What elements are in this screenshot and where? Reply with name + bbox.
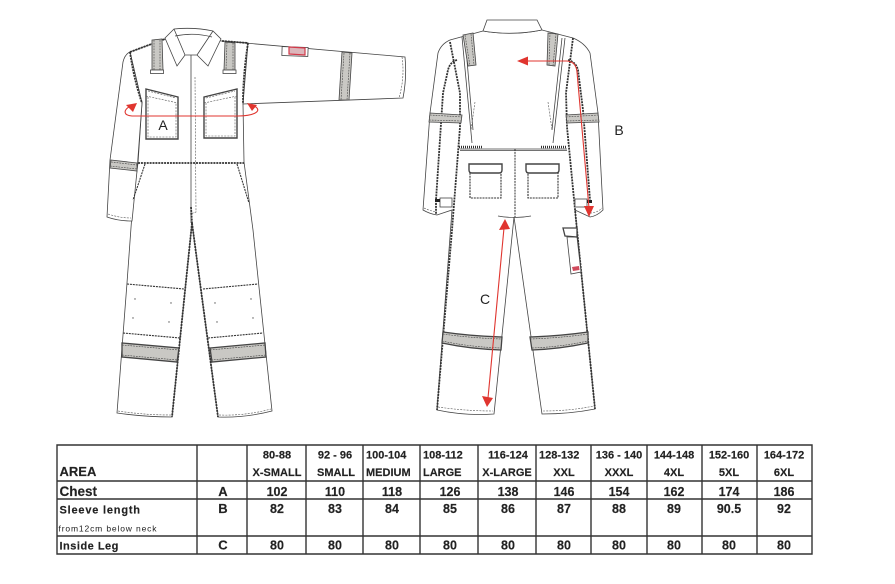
header row: [60, 450, 804, 479]
header row: MEDIUM: [366, 467, 411, 479]
inside leg row: 80: [667, 538, 681, 552]
forearm reflective band: [110, 160, 137, 171]
back shoulder bands: [463, 33, 558, 66]
inside leg row: 80: [557, 538, 571, 552]
header row: X-LARGE: [482, 467, 532, 479]
inner leg seams: [172, 223, 218, 417]
front body outline: [117, 39, 272, 417]
label B: B: [614, 122, 624, 138]
header row: X-SMALL: [253, 467, 302, 479]
chest row: 154: [609, 485, 629, 499]
sleeve length row: 87: [557, 502, 571, 516]
sleeve length row: 83: [328, 502, 342, 516]
leg tool pocket: [563, 228, 581, 274]
back body outline: [423, 30, 603, 414]
sleeve reflective band: [339, 52, 352, 100]
header row: 128-132: [539, 450, 579, 462]
right knee panel: [203, 284, 263, 338]
sleeve length row: 89: [667, 502, 681, 516]
header row: SMALL: [317, 467, 355, 479]
chest row: 186: [774, 485, 794, 499]
chest row: 102: [267, 485, 287, 499]
table grid: [57, 445, 812, 554]
left leg reflective band: [122, 343, 179, 362]
collar: [165, 28, 221, 66]
sleeve length row: 85: [443, 502, 457, 516]
sleeve length row: 86: [501, 502, 515, 516]
left sleeve: [107, 52, 142, 221]
sleeve length row: 90.5: [717, 502, 741, 516]
inside leg row: C: [218, 538, 228, 552]
header row: LARGE: [423, 467, 462, 479]
header row: 100-104: [366, 450, 407, 462]
sleeve badge: [282, 47, 308, 56]
right back pocket: [526, 164, 559, 198]
chest row: Chest: [60, 484, 98, 499]
shoulder bands: [150, 39, 236, 74]
sleeve length row: from12cm below neck: [58, 524, 157, 534]
chest row: 146: [554, 485, 574, 499]
sleeve length row: 82: [270, 502, 284, 516]
cuff tabs: [424, 198, 602, 213]
chest row: A: [218, 484, 228, 499]
inside leg row: 80: [777, 538, 791, 552]
raised right sleeve: [222, 41, 406, 104]
inside leg row: 80: [328, 538, 342, 552]
header row: XXL: [553, 467, 575, 479]
chest row: 162: [664, 485, 684, 499]
hem stitching: [118, 409, 271, 415]
inside leg row: 80: [501, 538, 515, 552]
right chest pocket: [204, 89, 237, 138]
header row: 116-124: [488, 450, 529, 462]
header row: 4XL: [664, 467, 684, 479]
sleeve measurement arrow B: [517, 56, 594, 217]
inside leg row: [60, 538, 791, 552]
sleeve length row: B: [218, 501, 228, 516]
header row: 108-112: [423, 450, 463, 462]
header row: 5XL: [719, 467, 739, 479]
inside leg row: 80: [270, 538, 284, 552]
back hem stitching: [438, 406, 594, 411]
armhole seams: [130, 43, 248, 103]
header row: 164-172: [764, 450, 804, 462]
chest measurement arrow A: [125, 103, 258, 116]
inside leg row: 80: [443, 538, 457, 552]
sleeve length row: Sleeve length: [60, 504, 141, 516]
header row: 136 - 140: [596, 450, 642, 462]
waist seam: [138, 162, 244, 164]
chest row: 174: [719, 485, 739, 499]
sleeve length row: 88: [612, 502, 626, 516]
centre back seam: [514, 149, 516, 217]
inside leg row: 80: [385, 538, 399, 552]
label C: C: [480, 291, 490, 307]
waist elastic: [459, 146, 566, 148]
zipper placket: [190, 55, 196, 223]
back panel lines: [462, 37, 565, 143]
header row: 80-88: [263, 450, 291, 462]
sleeve seams: [437, 42, 460, 410]
sleeve length row: 92: [777, 502, 791, 516]
size table: [57, 445, 812, 554]
chest row: 138: [498, 485, 518, 499]
left knee panel: [123, 284, 184, 338]
header row: 92 - 96: [318, 450, 352, 462]
chest row: 126: [440, 485, 460, 499]
header row: 6XL: [774, 467, 794, 479]
back sleeve reflective bands: [429, 113, 599, 123]
chest row: 118: [382, 485, 402, 499]
back left leg band: [442, 332, 502, 350]
inside leg row: Inside Leg: [60, 540, 119, 552]
inside leg row: 80: [612, 538, 626, 552]
back right leg band: [530, 332, 588, 350]
side pocket seams: [133, 164, 249, 203]
sleeve length row: 84: [385, 502, 399, 516]
header row: AREA: [60, 464, 97, 479]
header row: 144-148: [654, 450, 694, 462]
chest row: [60, 484, 794, 499]
inside leg measurement arrow C: [482, 219, 510, 407]
right leg reflective band: [210, 343, 266, 362]
back collar: [483, 20, 542, 33]
sleeve length row: [58, 501, 791, 534]
header row: 152-160: [709, 450, 749, 462]
inside leg row: 80: [722, 538, 736, 552]
back waist seam: [460, 149, 567, 150]
left back pocket: [469, 164, 502, 198]
coverall back view: [423, 20, 603, 414]
left chest pocket: [146, 89, 178, 139]
label A: A: [158, 117, 168, 133]
header row: XXXL: [605, 467, 634, 479]
chest row: 110: [325, 485, 345, 499]
coverall front view: [107, 28, 406, 417]
